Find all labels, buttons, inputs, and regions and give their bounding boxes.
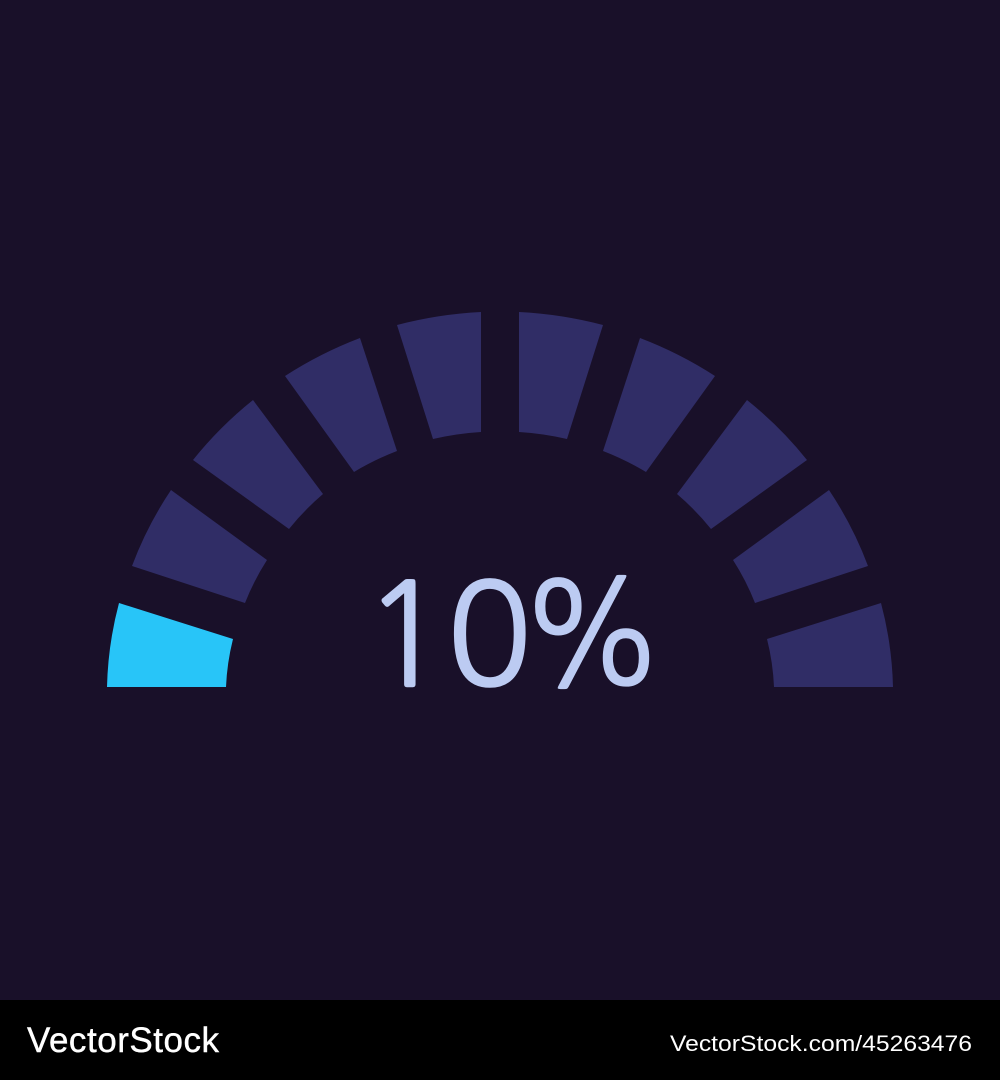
footer url: VectorStock.com/45263476 (670, 1031, 972, 1056)
gauge segment 5 (397, 312, 481, 439)
gauge segment 2 (132, 490, 267, 603)
semicircular gauge chart (107, 312, 893, 687)
gauge segment 8 (677, 400, 807, 529)
percentage value (362, 563, 666, 707)
footer bar (0, 1000, 1000, 1080)
gauge segment 10 (767, 603, 893, 687)
gauge segment 3 (193, 400, 323, 529)
gauge segment 9 (733, 490, 868, 603)
gauge segment 6 (519, 312, 603, 439)
percentage value: 0 (446, 564, 533, 707)
gauge segment 1: active (107, 603, 233, 687)
footer logo: VectorStock (27, 1021, 220, 1060)
percentage value: 1 (362, 564, 449, 707)
gauge segment 7 (603, 338, 715, 472)
gauge segment 4 (285, 338, 397, 472)
percentage value: % (519, 563, 666, 707)
